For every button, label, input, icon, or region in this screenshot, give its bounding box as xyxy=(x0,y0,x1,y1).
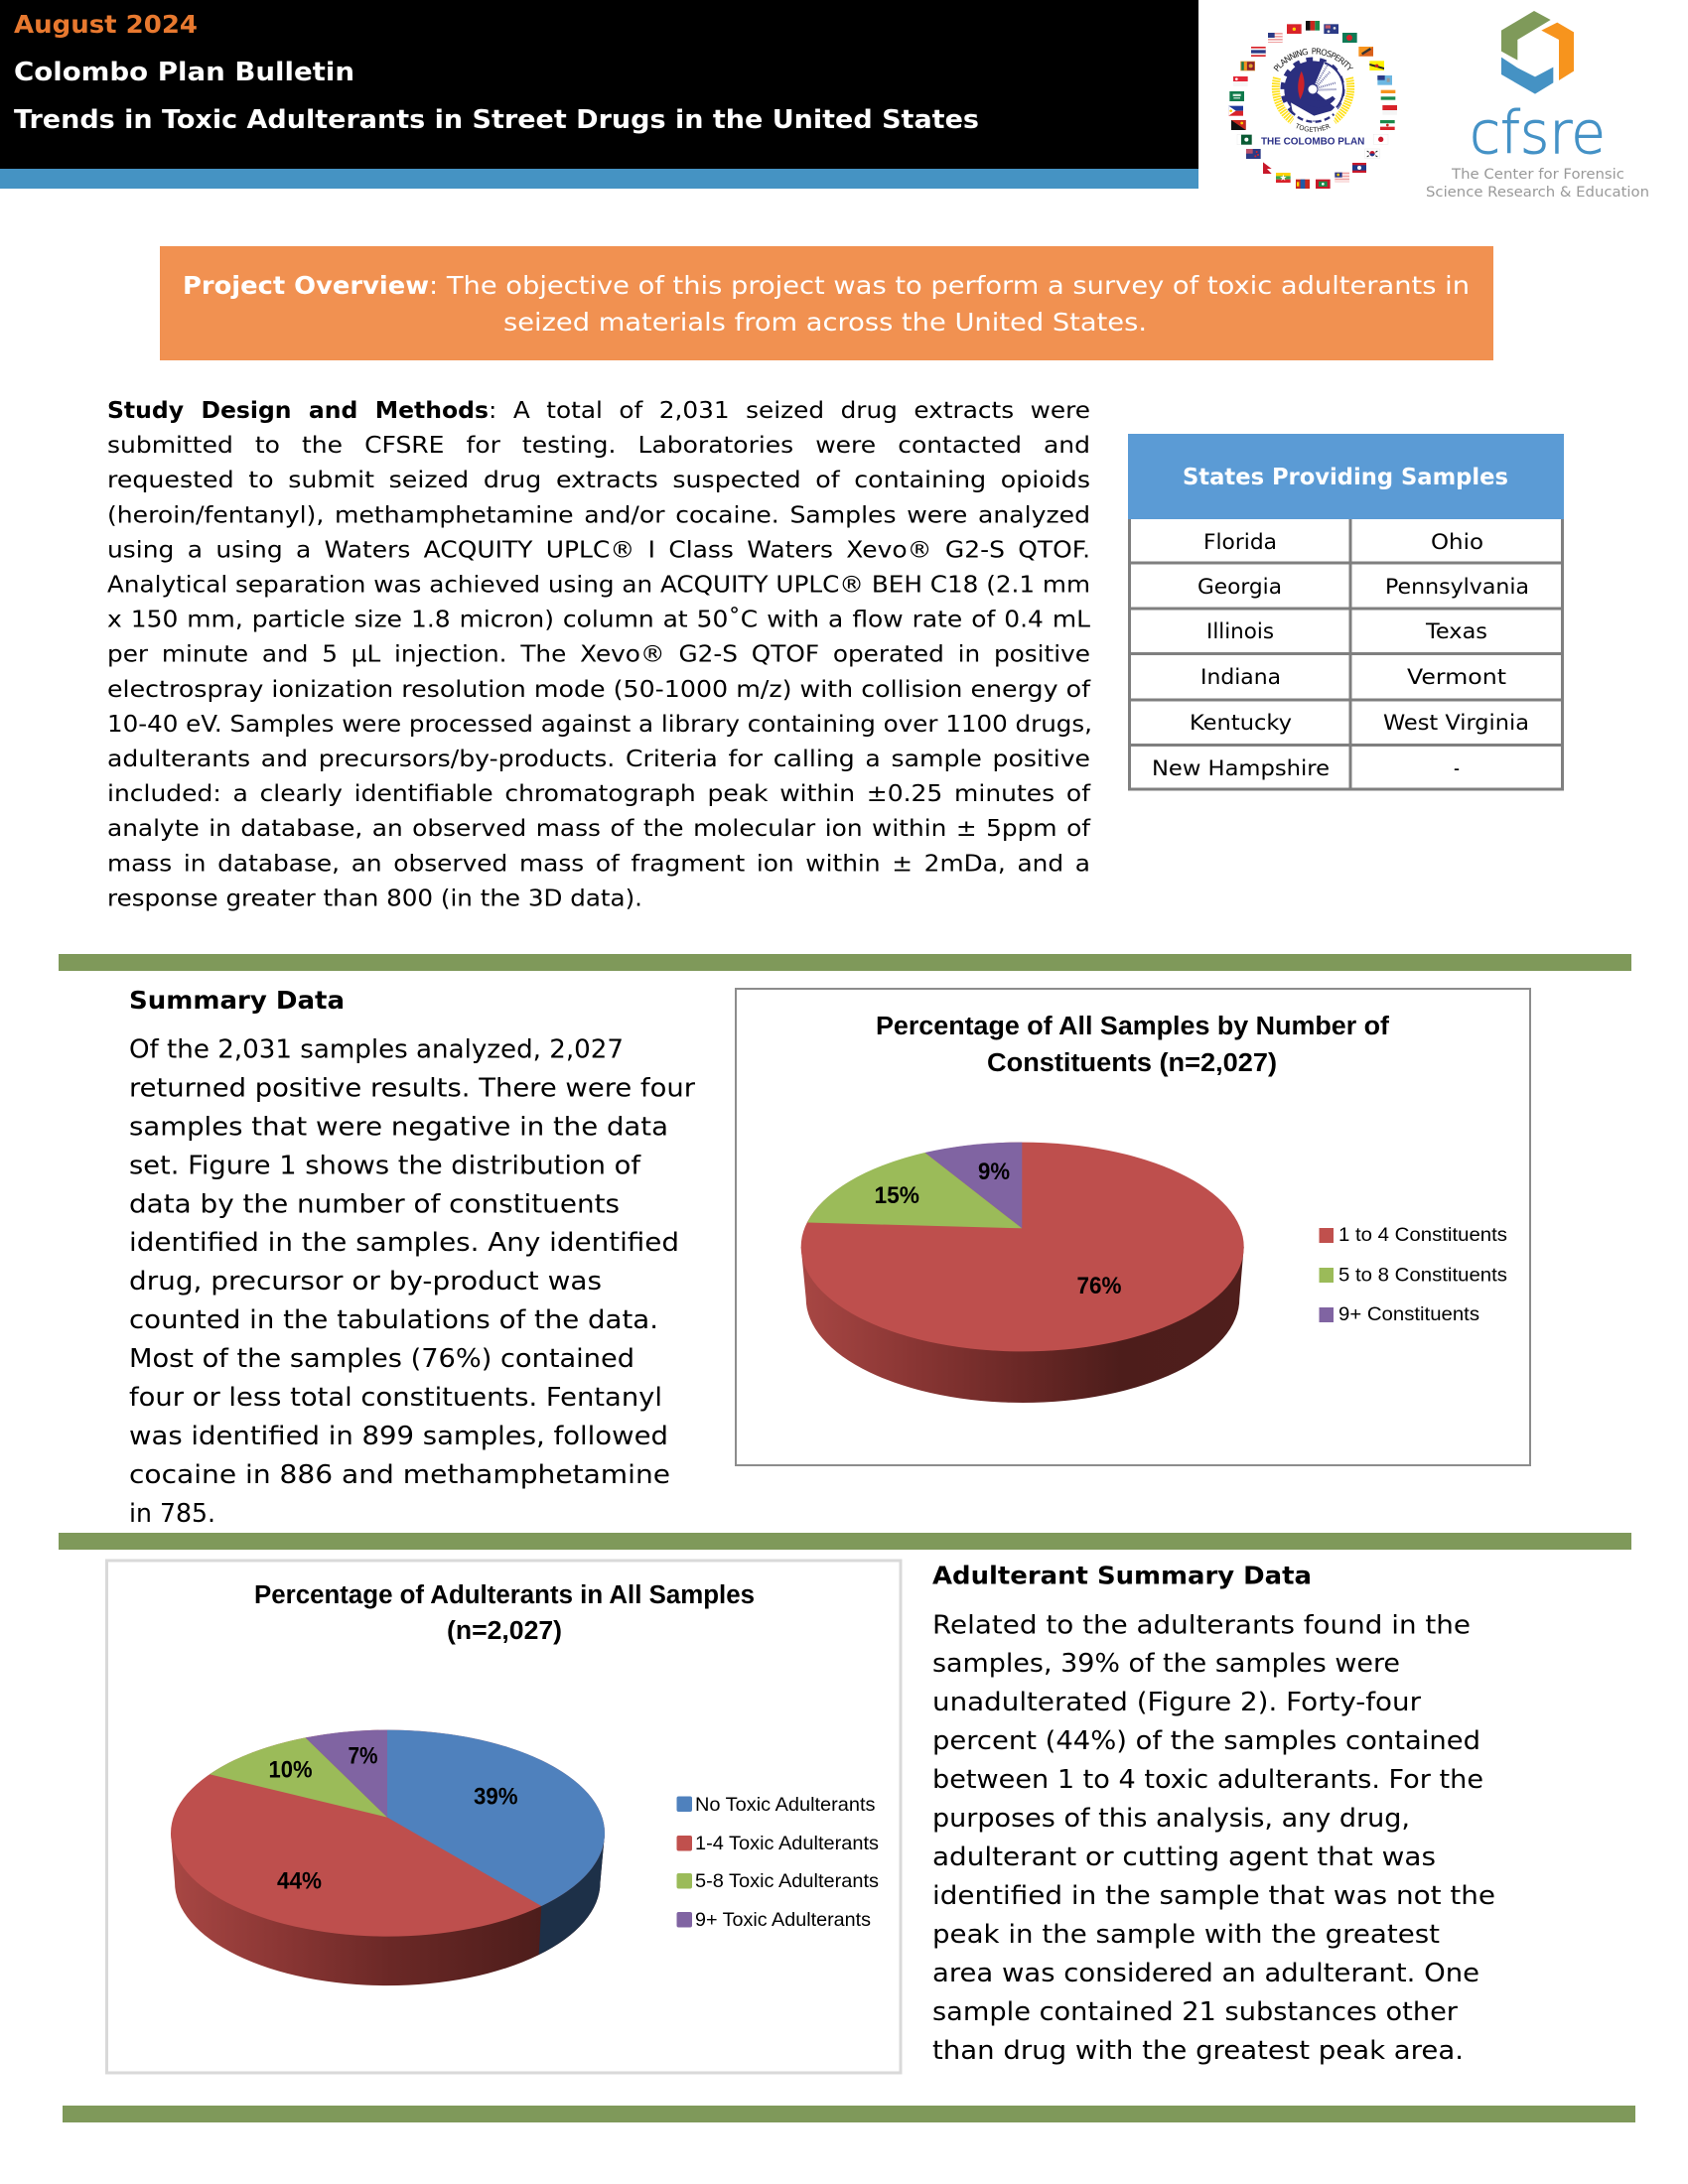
paragraph: counted in the tabulations of the data. xyxy=(129,1305,658,1335)
table cells: Florida xyxy=(1203,530,1277,555)
text block: study design and methods: 10-40 eV. Samples were processed against a library containing over 1100 drugs, xyxy=(107,712,1092,738)
table cells: - xyxy=(1454,756,1460,781)
chart 1 legend: 9+ Constituents xyxy=(1338,1303,1479,1325)
table cells: Vermont xyxy=(1407,665,1506,690)
table cells: West Virginia xyxy=(1383,711,1529,736)
text block: study design and methods: electrospray ionization resolution mode (50-1000 m/z) with collision energy of xyxy=(107,677,1091,703)
flag ring xyxy=(1228,21,1397,189)
paragraph: peak in the sample with the greatest xyxy=(932,1920,1440,1950)
panel: project overview xyxy=(160,246,1493,360)
slice labels: 15% xyxy=(874,1182,919,1209)
table header: States Providing Samples xyxy=(1183,465,1508,490)
slice labels xyxy=(874,1159,1122,1299)
paragraph: four or less total constituents. Fentanyl xyxy=(129,1383,662,1413)
table cells: Kentucky xyxy=(1190,711,1292,736)
text block: study design and methods: submitted to the CFSRE for testing. Laboratories were contacted and xyxy=(107,433,1090,459)
report title: Trends in Toxic Adulterants in Street Drugs in the United States xyxy=(14,105,979,135)
paragraph: set. Figure 1 shows the distribution of xyxy=(129,1151,641,1180)
paragraph: data by the number of constituents xyxy=(129,1189,620,1219)
paragraph: between 1 to 4 toxic adulterants. For the xyxy=(932,1765,1483,1795)
text block: study design and methods: Study Design and Methods xyxy=(107,398,489,424)
panel: summary data text xyxy=(129,986,696,1529)
tagline: Science Research & Education xyxy=(1426,185,1649,201)
overview text: seized materials from across the United States. xyxy=(503,308,1147,337)
paragraph: sample contained 21 substances other xyxy=(932,1997,1459,2027)
logo: The Colombo Plan xyxy=(1228,21,1397,189)
divider bar: middle xyxy=(59,1533,1631,1550)
table cells: Indiana xyxy=(1200,665,1281,690)
heading: Summary Data xyxy=(129,986,345,1015)
slice labels: 76% xyxy=(1076,1273,1122,1299)
chart 1 legend: 1 to 4 Constituents xyxy=(1338,1224,1507,1246)
chart 2 legend: No Toxic Adulterants xyxy=(695,1794,876,1816)
panel: chart 1, samples by number of constituents xyxy=(736,989,1530,1465)
chart 1 title: Percentage of All Samples by Number of xyxy=(876,1013,1390,1040)
text block: study design and methods: x 150 mm, particle size 1.8 micron) column at 50˚C with a flow rate of 0.4 mL xyxy=(107,607,1090,633)
heading: Adulterant Summary Data xyxy=(932,1561,1312,1590)
table cells: Georgia xyxy=(1197,575,1282,600)
header banner xyxy=(0,0,1198,189)
logo name: THE COLOMBO PLAN xyxy=(1261,137,1364,148)
table cells xyxy=(1152,530,1529,781)
chart 1 title: Constituents (n=2,027) xyxy=(987,1049,1277,1077)
emblem gear xyxy=(1271,48,1354,132)
logo: CFSRE xyxy=(1426,11,1649,201)
text block: study design and methods: response greater than 800 (in the 3D data). xyxy=(107,886,642,911)
chart 1 title xyxy=(876,1013,1390,1077)
text block: study design and methods: analyte in database, an observed mass of the molecular ion within ± 5ppm of xyxy=(107,816,1091,842)
chart 1 legend: 5 to 8 Constituents xyxy=(1338,1265,1507,1287)
paragraph: in 785. xyxy=(129,1499,215,1529)
chart 2 legend: 5-8 Toxic Adulterants xyxy=(695,1870,879,1892)
table cells: Illinois xyxy=(1206,619,1274,644)
overview text xyxy=(183,271,1470,337)
table header xyxy=(1128,434,1564,519)
chart 2 legend: 1-4 Toxic Adulterants xyxy=(695,1833,879,1854)
paragraph: adulterant or cutting agent that was xyxy=(932,1843,1436,1872)
text block: study design and methods: (heroin/fentanyl), methamphetamine and/or cocaine. Samples were analyzed xyxy=(107,502,1090,528)
text block: study design and methods: mass in database, an observed mass of fragment ion within ± 2mDa, and a xyxy=(107,851,1090,877)
tagline xyxy=(1426,167,1649,201)
table: states providing samples xyxy=(1128,434,1564,790)
paragraph: Of the 2,031 samples analyzed, 2,027 xyxy=(129,1034,624,1064)
paragraph: drug, precursor or by-product was xyxy=(129,1267,602,1297)
tagline: The Center for Forensic xyxy=(1451,167,1624,183)
date: August 2024 xyxy=(14,10,198,39)
text block: study design and methods: adulterants and precursors/by-products. Criteria for calling a sample positive xyxy=(107,747,1090,772)
pie chart 1 xyxy=(801,1143,1244,1403)
paragraph: cocaine in 886 and methamphetamine xyxy=(129,1460,670,1490)
panel: adulterant summary data text xyxy=(932,1561,1495,2066)
chart 2 legend: 9+ Toxic Adulterants xyxy=(695,1909,871,1931)
paragraph xyxy=(932,1611,1495,2066)
paragraph: was identified in 899 samples, followed xyxy=(129,1422,668,1451)
chart 2 title: (n=2,027) xyxy=(447,1617,562,1645)
slice labels xyxy=(268,1743,518,1894)
paragraph: identified in the sample that was not the xyxy=(932,1881,1495,1911)
slice labels: 7% xyxy=(348,1743,377,1769)
paragraph: percent (44%) of the samples contained xyxy=(932,1726,1480,1756)
text block: study design and methods xyxy=(107,398,1092,911)
table cells: Pennsylvania xyxy=(1385,575,1529,600)
paragraph: area was considered an adulterant. One xyxy=(932,1959,1479,1988)
text block: study design and methods: per minute and 5 µL injection. The Xevo® G2-S QTOF operated in positive xyxy=(107,642,1090,668)
table cells: New Hampshire xyxy=(1152,756,1330,781)
paragraph: Related to the adulterants found in the xyxy=(932,1611,1471,1641)
paragraph: Most of the samples (76%) contained xyxy=(129,1344,634,1374)
overview text: : The objective of this project was to perform a survey of toxic adulterants in xyxy=(429,271,1470,300)
paragraph xyxy=(129,1034,696,1529)
text block: study design and methods: included: a clearly identifiable chromatograph peak within ±0.25 minutes of xyxy=(107,781,1091,807)
slice labels: 9% xyxy=(978,1159,1010,1185)
emblem gear: TOGETHER xyxy=(1297,123,1331,132)
table cells: Texas xyxy=(1425,619,1487,644)
bulletin name: Colombo Plan Bulletin xyxy=(14,58,354,87)
slice labels: 44% xyxy=(277,1868,322,1894)
slice labels: 39% xyxy=(474,1783,518,1811)
text block: study design and methods: requested to submit seized drug extracts suspected of containing opioids xyxy=(107,468,1090,493)
paragraph: than drug with the greatest peak area. xyxy=(932,2036,1464,2066)
paragraph: samples, 39% of the samples were xyxy=(932,1649,1400,1679)
emblem gear: PLANNING PROSPERITY xyxy=(1273,48,1354,71)
text block: study design and methods: : A total of 2,031 seized drug extracts were xyxy=(489,398,1090,424)
text block: study design and methods: Analytical separation was achieved using an ACQUITY UPLC® BEH C18 (2.1 mm xyxy=(107,572,1090,598)
panel: chart 2, adulterants in all samples xyxy=(107,1561,901,2073)
paragraph: purposes of this analysis, any drug, xyxy=(932,1804,1410,1834)
slice labels: 10% xyxy=(268,1757,312,1783)
chart 2 title: Percentage of Adulterants in All Samples xyxy=(254,1581,755,1609)
text block: study design and methods: using a using a Waters ACQUITY UPLC® I Class Waters Xevo® G2-S QTOF. xyxy=(107,537,1090,563)
chart 2 legend xyxy=(677,1794,879,1931)
wordmark: cfsre xyxy=(1470,98,1606,167)
icon: hexagon mark xyxy=(1501,11,1574,94)
pie chart 2 xyxy=(171,1730,605,1985)
paragraph: samples that were negative in the data xyxy=(129,1112,668,1142)
table cells: Ohio xyxy=(1431,530,1483,555)
overview text: Project Overview xyxy=(183,271,429,300)
divider bar: bottom xyxy=(63,2106,1635,2122)
chart 2 title xyxy=(254,1581,755,1645)
paragraph: identified in the samples. Any identified xyxy=(129,1228,679,1258)
chart 1 legend xyxy=(1319,1224,1507,1325)
paragraph: unadulterated (Figure 2). Forty-four xyxy=(932,1688,1422,1717)
paragraph: returned positive results. There were four xyxy=(129,1073,696,1103)
divider bar: top xyxy=(59,954,1631,971)
